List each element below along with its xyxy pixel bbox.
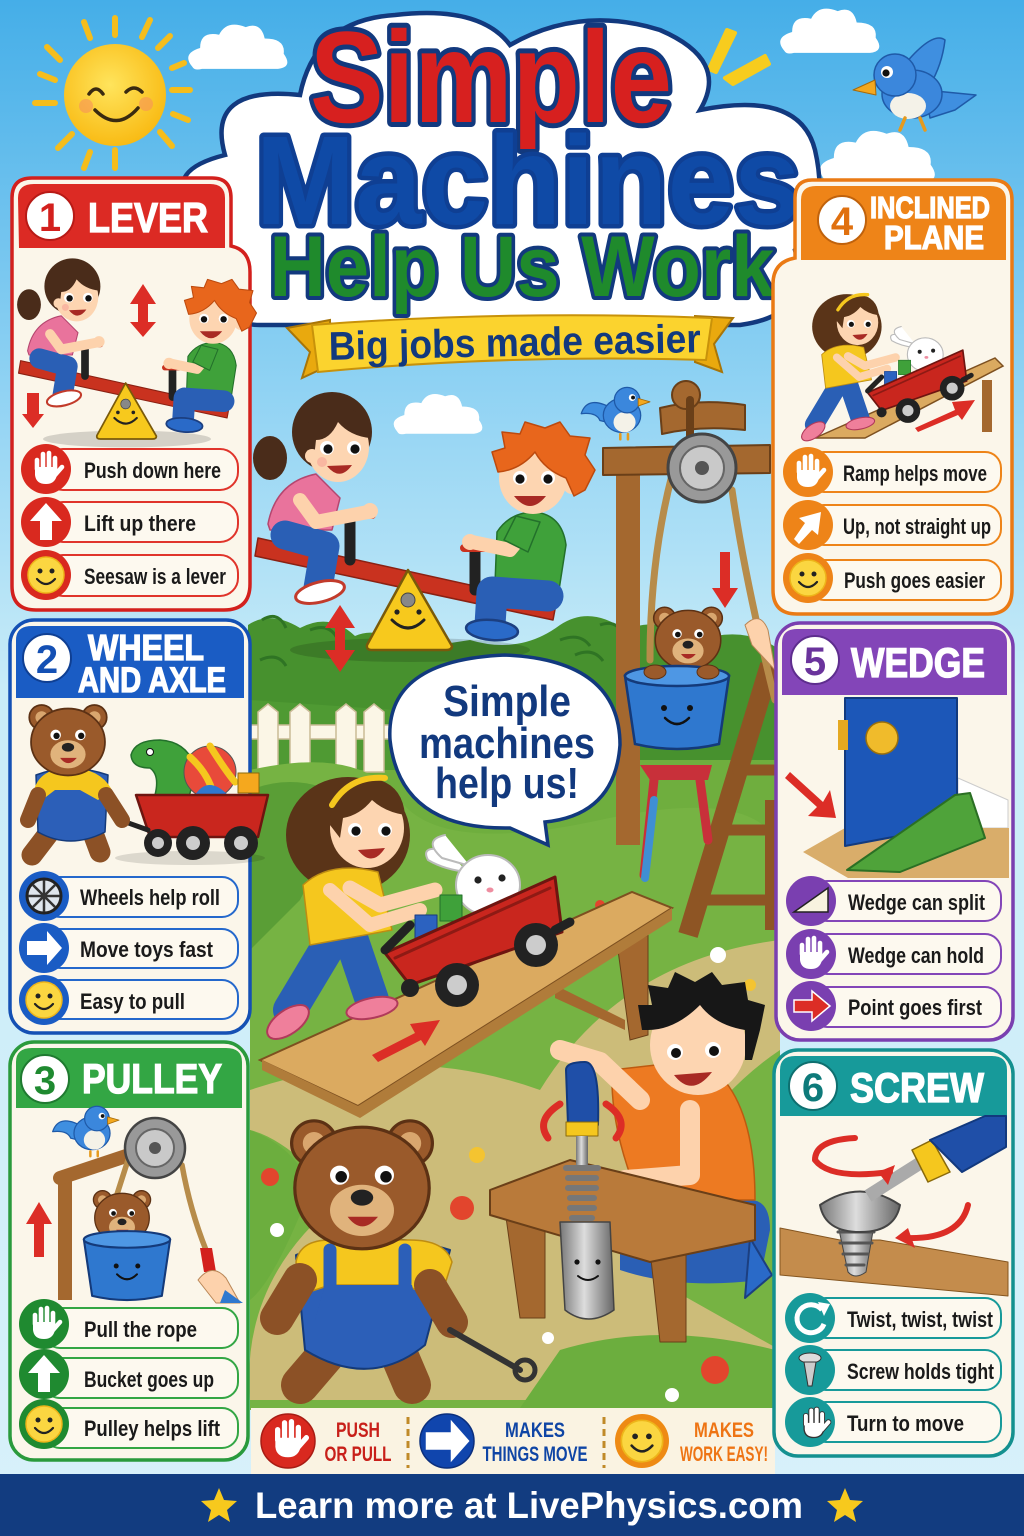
header: screw: SCREW [850, 1064, 984, 1111]
speech bubble: machines [419, 719, 595, 768]
bird [53, 1106, 119, 1156]
girl and wagon illustration [798, 294, 971, 445]
header: inclined plane: PLANE [884, 219, 984, 256]
header: inclined plane: INCLINED [870, 190, 990, 225]
row: wheels help roll: Wheels help roll [80, 885, 220, 910]
row: point goes first [786, 981, 1001, 1031]
row: push down here: Push down here [84, 458, 221, 483]
cloud: top right [780, 9, 879, 54]
header: lever: 1 [39, 196, 61, 240]
row: lift up there: Lift up there [84, 511, 196, 536]
garden background [248, 616, 780, 1410]
legend strip [251, 1408, 775, 1474]
legend: makes things move: THINGS MOVE [482, 1443, 588, 1466]
panel 2: wheel and axle [10, 620, 268, 1033]
row: push down here [21, 444, 238, 494]
legend: makes things move [420, 1414, 588, 1468]
row: up, not straight up [783, 500, 1001, 550]
seesaw scene [253, 392, 595, 662]
big bear [277, 1121, 535, 1385]
ramp illustration [815, 358, 1003, 438]
girl pushing wagon [261, 777, 570, 1046]
row: wedge can split: Wedge can split [848, 890, 986, 915]
footer: Learn more at LivePhysics.com [255, 1485, 803, 1526]
row: easy to pull [19, 975, 238, 1025]
legend: push or pull: OR PULL [324, 1443, 392, 1466]
cloud: top left [188, 25, 287, 70]
header: lever [18, 184, 225, 248]
bird on pulley beam [581, 387, 650, 439]
row: easy to pull: Easy to pull [80, 989, 185, 1014]
header: lever: LEVER [88, 194, 208, 241]
row: push goes easier: Push goes easier [844, 568, 985, 593]
cloud: above seesaw [394, 394, 482, 434]
header: pulley: 3 [34, 1059, 56, 1103]
panel 3: pulley [10, 1042, 248, 1460]
arrow: bucket down [712, 552, 738, 608]
legend: makes work easy: WORK EASY! [680, 1443, 768, 1466]
pulley tower [603, 381, 775, 935]
row: pull the rope [19, 1299, 238, 1349]
row: seesaw is a lever: Seesaw is a lever [84, 564, 226, 589]
header: inclined plane: 4 [831, 200, 854, 244]
panel 4: inclined plane [773, 180, 1012, 614]
row: wedge can split [786, 876, 1001, 926]
row: turn to move [785, 1397, 1001, 1447]
legend: push or pull: PUSH [336, 1419, 380, 1442]
arrow: up the ramp [372, 1020, 440, 1062]
row: pulley helps lift: Pulley helps lift [84, 1416, 221, 1441]
header: screw: 6 [802, 1066, 824, 1110]
door and wedge illustration [785, 698, 1009, 878]
row: point goes first: Point goes first [848, 995, 983, 1020]
icon: blue bird top right [853, 38, 976, 130]
row: wheels help roll [19, 871, 238, 921]
row: wedge can hold [786, 929, 1001, 979]
legend: makes work easy [615, 1414, 768, 1468]
sparkles [709, 30, 769, 84]
bear illustration [28, 705, 122, 855]
ribbon banner: Big jobs made easier [328, 317, 701, 369]
header: wheel and axle: AND AXLE [78, 661, 226, 700]
row: bucket goes up [19, 1349, 238, 1399]
speech bubble: Simple [443, 677, 571, 726]
header: pulley: PULLEY [82, 1055, 222, 1102]
panel 1: lever [12, 178, 256, 610]
row: wedge can hold: Wedge can hold [848, 943, 984, 968]
header: wheel and axle [16, 626, 244, 700]
title [256, 4, 800, 315]
ramp [260, 892, 672, 1118]
row: move toys fast [19, 923, 238, 973]
row: lift up there [21, 497, 238, 547]
header: pulley [16, 1048, 242, 1108]
row: move toys fast: Move toys fast [80, 937, 214, 962]
arrow up ramp [915, 400, 975, 432]
speech bubble [390, 655, 620, 845]
star right [827, 1488, 863, 1522]
panel 5: wedge [776, 623, 1013, 1040]
bear in bucket [625, 607, 775, 749]
arrow up [26, 1202, 52, 1257]
row: screw holds tight [785, 1345, 1001, 1395]
header: wedge [782, 629, 1007, 695]
screw illustration [780, 1116, 1008, 1296]
title: Simple [310, 4, 672, 150]
wagon illustration [115, 740, 268, 865]
header: inclined plane [801, 186, 1006, 260]
header: wedge: WEDGE [851, 639, 985, 686]
footer [0, 1474, 1024, 1536]
row: twist, twist, twist [785, 1293, 1001, 1343]
row: push goes easier [783, 553, 1001, 603]
legend: makes work easy: MAKES [694, 1419, 754, 1442]
header: screw [780, 1056, 1007, 1116]
cloud: right of title [820, 131, 935, 183]
row: twist, twist, twist: Twist, twist, twist [847, 1307, 994, 1332]
row: ramp helps move [783, 447, 1001, 497]
pulley illustration [60, 1118, 243, 1303]
boy with screwdriver and bench [490, 972, 772, 1342]
row: pulley helps lift [19, 1399, 238, 1449]
speech bubble: help us! [435, 759, 579, 808]
row: pull the rope: Pull the rope [84, 1317, 197, 1342]
header: wedge: 5 [804, 640, 826, 684]
title cloud [183, 13, 819, 325]
star left [201, 1488, 237, 1522]
row: turn to move: Turn to move [847, 1411, 964, 1436]
arrows [22, 284, 156, 428]
header: wheel and axle: WHEEL [88, 627, 204, 668]
title: Machines [256, 110, 800, 251]
row: seesaw is a lever [21, 550, 238, 600]
legend: makes things move: MAKES [505, 1419, 565, 1442]
title: Help Us Work [270, 219, 775, 315]
header: wheel and axle: 2 [36, 638, 58, 682]
panel 6: screw [774, 1050, 1013, 1456]
row: bucket goes up: Bucket goes up [84, 1367, 214, 1392]
seesaw illustration [17, 258, 257, 447]
sun [35, 18, 190, 168]
arrow: up and down [325, 605, 355, 672]
legend: push or pull [261, 1414, 392, 1468]
